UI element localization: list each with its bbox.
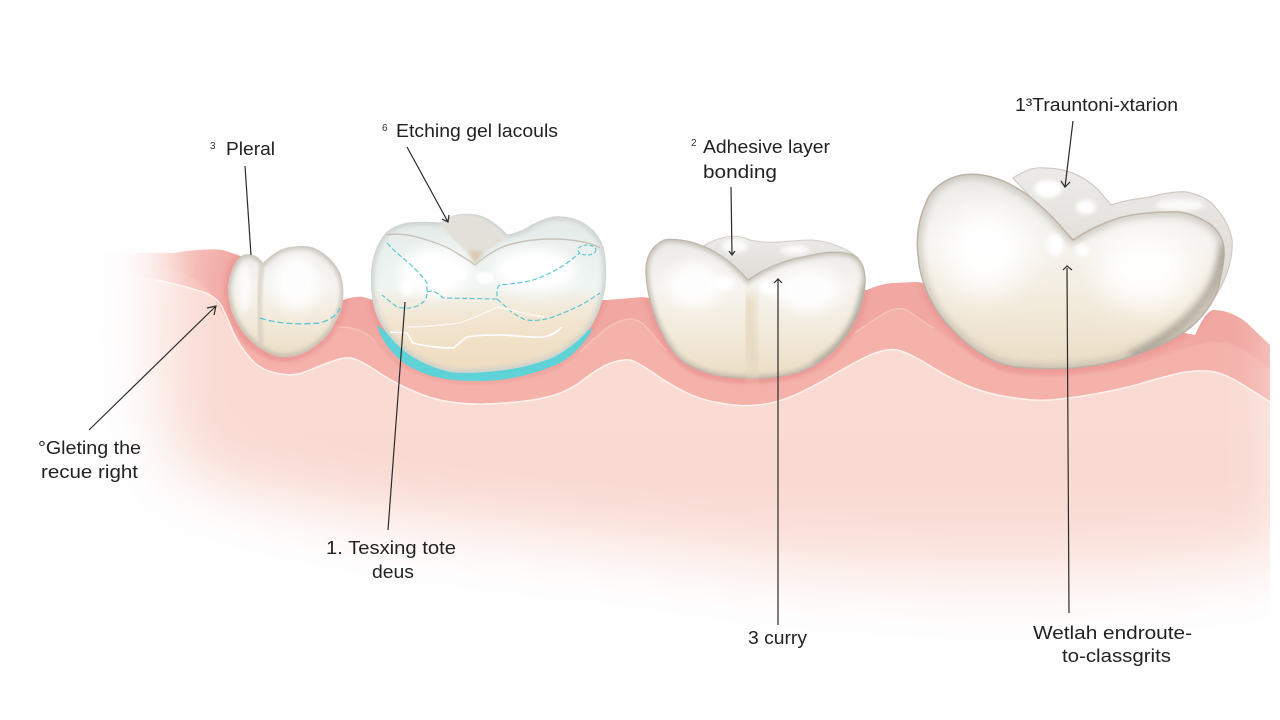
label: Pleral: Pleral [226,139,275,159]
label: Wetlah: to-classgrits [1062,646,1171,666]
gum tissue [136,249,1270,601]
gum inner band [194,250,1268,384]
label: Adhesive layer: Adhesive layer [703,137,830,157]
label: Gleting: recue right [41,462,138,482]
back cusps [1013,168,1232,303]
tooth 4 [917,168,1232,369]
label: Wetlah: Wetlah endroute- [1033,623,1192,643]
label: Wetlah [1033,266,1192,666]
dashed curing line [260,308,340,324]
dashed margin lines [382,243,600,320]
label: Adhesive layer: bonding [703,162,777,182]
label: Gleting [38,306,216,482]
tooth 1 [228,246,343,357]
label: curry [748,279,807,648]
gum outer band [160,250,1270,405]
white cracks [390,327,562,348]
label: Pleral [210,139,275,255]
label: Etching gel: Etching gel lacouls [396,121,558,141]
tooth 3 [646,236,866,378]
label: Etching gel [382,121,558,222]
gum highlight line [157,280,1270,406]
label: Traunton: 1³Trauntoni-xtarion [1015,95,1178,115]
label: Testxing [326,302,456,582]
label: Adhesive layer [691,137,830,255]
tooth 2 [371,214,606,381]
back cusps [700,236,858,290]
gum ridge line [324,309,933,352]
label: Gleting: °Gleting the [38,438,141,458]
label: Testxing: 1. Tesxing tote [326,538,456,558]
label: Adhesive layer: 2 [691,138,697,149]
label: Etching gel: 6 [382,123,388,134]
dark rim around teeth [224,255,1210,383]
label: Pleral: 3 [210,141,216,152]
teal adhesive band [377,325,593,381]
label: Traunton [1015,95,1178,187]
label: Testxing: deus [372,562,414,582]
label: curry: 3 curry [748,628,807,648]
